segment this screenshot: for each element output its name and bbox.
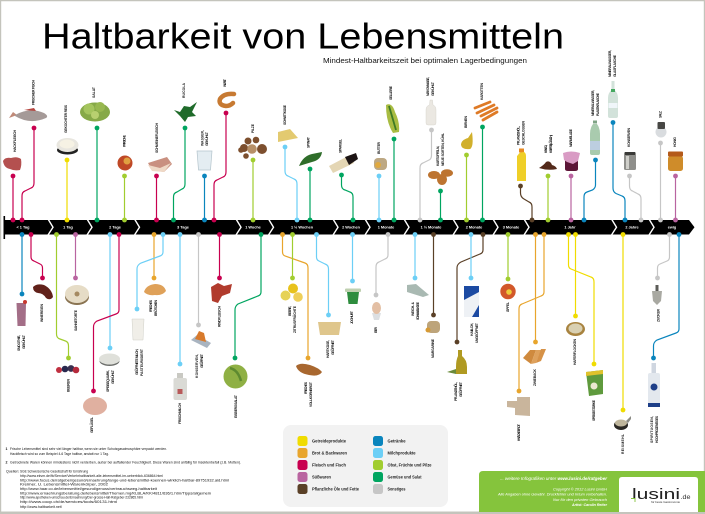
icon: lemons <box>280 284 303 302</box>
sources: Quellen: <box>6 470 19 474</box>
legend: Getreideprodukte: Getreideprodukte <box>312 438 347 444</box>
item: Honig: HONIG <box>673 137 677 147</box>
item: Pflanzenöl, geöffnet <box>447 232 485 401</box>
item: Frisches Vollkornbrot: FRISCHES <box>304 381 308 394</box>
item: Pfirsiche: PFIRSICHE <box>122 134 126 147</box>
item: Äpfel: ÄPFEL <box>506 302 510 312</box>
item: Zucker: ZUCKER <box>656 308 660 322</box>
item: Spinat <box>299 136 322 222</box>
timeline bar: 1 Monate <box>378 226 394 230</box>
icon: pear <box>461 132 473 149</box>
sources: http://www.apotheken-umschau.de/Ernaehrung/Der-grosse-Halt-Ratgeber-232865.html <box>20 496 143 500</box>
item: Birnen <box>461 115 473 222</box>
icon: smoothie glass <box>16 300 27 326</box>
item: Rindfleisch <box>211 232 232 327</box>
legend: Obst, Früchte und Pilze: Obst, Früchte und Pilze <box>388 462 432 468</box>
item: Salat: SALAT <box>92 86 96 98</box>
item: Innereien <box>29 232 53 322</box>
sources: http://www.ernaehrungsberatung.de/lebensmittel/Themen.mg/KLBLA/KK/4811/636/1.htm/Tipps/allgemein <box>20 492 211 496</box>
icon: tin of fish <box>191 331 211 348</box>
sources: http://www.ekvm.de/fb/Service/Verkehrhaltbarkeit-alle-lebensmittel-im-ueberblick-636864.html <box>20 474 163 478</box>
legend: Getränke: Getränke <box>388 438 406 444</box>
item: Butter: BUTTER <box>377 141 381 154</box>
icon: crispbread <box>507 397 530 416</box>
item: Wasser, gekühlt: WASSER, <box>200 130 204 146</box>
legend: Getränke <box>373 436 406 446</box>
sources: http://www.coop.ch/de/services/tools/60131.html <box>20 500 117 504</box>
item: Zwieback <box>523 232 546 386</box>
item: Fisch, geöffnet: GEÖFFNET <box>199 353 204 368</box>
title: Haltbarkeit von Lebensmitteln <box>42 16 564 56</box>
icon: glass bottle <box>608 81 618 118</box>
item: Schnittkäse: SCHNITTKÄSE <box>283 104 287 125</box>
icon: asparagus <box>329 153 358 173</box>
item: Sahnetorte: SAHNETORTE <box>74 309 78 331</box>
item: Rucola: RUCOLA <box>182 82 186 98</box>
item: Rucola <box>171 82 197 222</box>
footer panel: credits: Nur für den privaten Gebrauch <box>553 498 607 502</box>
item: Eier: EIER <box>374 326 378 333</box>
legend: Pflanzliche Öle und Fette: Pflanzliche Öle und Fette <box>312 486 360 492</box>
item: Mayonnaise, gekühlt: GEKÜHLT <box>430 81 435 96</box>
item: Weich- und Schimmelkäse: WEICH- & <box>411 301 415 316</box>
item: Geöffnete Milch: GEÖFFNETE MILCH, <box>134 349 139 375</box>
item: Pflanzenöl, geschlossen <box>516 120 534 222</box>
item: Mineralwasser, Glasflasche: GLASFLASCHE <box>613 54 617 77</box>
icon: apple <box>500 284 516 299</box>
item: H-Milch, ungeöffnet: UNGEÖFFNET <box>474 322 479 343</box>
item: Mayonnaise, gekühlt <box>418 77 436 222</box>
icon: egg in cup <box>372 302 381 320</box>
item: Mineralwasser, Plastikflasche: PLASTIKFLASCHE <box>596 92 600 116</box>
item: Spargel <box>329 139 358 222</box>
item: Spirituosen, hochprozentiges: SPIRITUOSEN, <box>650 416 654 443</box>
item: Reismehl <box>614 232 631 454</box>
icon: peach <box>118 156 132 170</box>
sources: http://www.haar.co.de/lebensmittel/gesund/genuss/verbrauchsweg-haltbarkeit <box>20 487 157 491</box>
item: Speisequark, gekühlt <box>99 232 120 392</box>
legend: Milchprodukte <box>373 448 416 458</box>
legend: Brot & Backwaren <box>298 448 347 458</box>
icon: potatoes <box>428 169 453 185</box>
icon: cream cake <box>65 285 89 305</box>
icon: jam jar <box>563 152 580 171</box>
legend: Sonstiges <box>373 484 406 494</box>
icon: spinach <box>299 152 322 166</box>
item: Rindfleisch: RINDFLEISCH <box>218 305 222 327</box>
item: Gekochter Reis: GEKOCHTER REIS <box>64 104 68 133</box>
footnotes: 2 <box>6 460 8 464</box>
timeline bar: 1 Tag <box>63 226 73 230</box>
icon: rusks <box>523 349 546 364</box>
footer panel: credits <box>479 471 705 512</box>
item: Joghurt <box>345 232 361 324</box>
item: Spirituosen, hochprozentiges <box>648 232 681 443</box>
legend: Süßwaren: Süßwaren <box>312 474 331 480</box>
item: Geöffnete Milch <box>132 232 165 376</box>
item: Gekochter Reis <box>56 104 78 222</box>
item: Frisches Vollkornbrot: VOLLKORNBROT <box>309 381 313 407</box>
icon: olive oil bottle <box>447 350 467 374</box>
timeline bar: 1 Jahr <box>564 226 576 230</box>
item: Sellerie: SELLERIE <box>389 85 393 100</box>
logo: lusini.de: .de <box>680 494 691 501</box>
timeline bar: 2 Monate <box>466 226 482 230</box>
item: Salz: SALZ <box>658 111 662 118</box>
sources <box>6 470 229 509</box>
footnotes: Frische Lebensmittel sind sehr viel länger haltbar, wenn sie unter Schutzgasatmosphäre verpackt werden. <box>10 447 167 451</box>
item: Wurst <box>212 78 234 222</box>
logo: lusini.de: lusini <box>632 486 680 503</box>
item: Karotten <box>475 82 497 222</box>
item: Hartkäse, geöffnet: GEÖFFNET <box>330 339 335 355</box>
item: Spinat: SPINAT <box>306 136 310 148</box>
icon: vodka bottle <box>648 363 660 407</box>
icon: starch pack <box>586 370 603 396</box>
item: Fisch, geöffnet: KONSERVEN, <box>195 354 199 378</box>
item: Frischer Fisch: FRISCHER FISCH <box>32 79 36 105</box>
item: Speisestärke <box>566 232 603 421</box>
item: H-Milch, ungeöffnet: H-MILCH, <box>470 323 474 336</box>
legend: Pflanzliche Öle und Fette <box>298 484 360 494</box>
item: Geöffnete Milch: PASTEURISIERT <box>140 348 144 376</box>
footnotes: 1 <box>6 447 8 451</box>
item: Haferflocken: HAFERFLOCKEN <box>573 338 577 365</box>
item: Knäckebrot: KNÄCKEBROT <box>517 423 521 441</box>
icon: butter <box>374 158 387 170</box>
item: Zitrusfrüchte: ZITRUSFRÜCHTE <box>292 305 297 333</box>
item: Beeren <box>54 232 79 392</box>
item: Kartoffeln <box>428 133 453 222</box>
icon: hard cheese block <box>318 322 341 335</box>
legend: Fleisch und Fisch: Fleisch und Fisch <box>312 462 346 468</box>
item: Smoothie, gekühlt <box>16 232 27 351</box>
item: Zitrusfrüchte <box>280 232 303 333</box>
icon: berries <box>56 365 79 373</box>
footer panel: credits: Artist: Carolin Reiter <box>571 503 608 507</box>
item: Zitrusfrüchte: BEERE, <box>288 306 292 316</box>
icon: mushrooms <box>238 137 267 159</box>
icon: poultry <box>83 397 107 415</box>
legend: Gemüse und Salat <box>373 472 422 482</box>
item: Pilze: PILZE <box>251 123 255 133</box>
timeline bar: 2 Tage <box>109 226 121 230</box>
item: Kartoffeln: KARTOFFELN, <box>436 146 440 166</box>
icon: carrots <box>475 102 497 120</box>
sources: http://www.focus.de/ratgeber/gesund/ernaehrung/lange-und-lebensmittel-koennen-wirklich-haltbar-89751932.aid.html <box>20 478 229 482</box>
item: Frisches Brötchen: BRÖTCHEN <box>153 299 158 316</box>
icon: loaf of bread <box>296 364 322 376</box>
icon: blue cheese <box>407 284 429 297</box>
icon: sausage ring <box>220 94 234 106</box>
icon: pork belly <box>148 157 172 172</box>
logo: lusini.de: für beste Gastronomie <box>651 500 681 504</box>
item: Birnen: BIRNEN <box>464 115 468 128</box>
sources: SGE Schweizerische Gesellschaft für Ernährung <box>20 470 88 474</box>
item: Hackfleisch: HACKFLEISCH <box>13 129 17 152</box>
item: Mineralwasser, Glasflasche <box>608 50 627 222</box>
timeline bar: 2 Wochen <box>342 226 361 230</box>
icon: quark bowl <box>99 354 120 366</box>
item: Hartkäse, geöffnet: HARTKÄSE, <box>326 340 330 358</box>
icon: white bottle <box>426 100 436 125</box>
item: Butter <box>374 141 387 222</box>
timeline bar: 1 ½ Wochen <box>291 226 314 230</box>
item: Frisches Vollkornbrot <box>280 232 322 407</box>
icon: fish <box>9 108 47 121</box>
legend: Obst, Früchte und Pilze <box>373 460 432 470</box>
item: Kakao, Kaffee: KAKAO, <box>544 145 548 153</box>
item: Eisbergsalat <box>224 232 263 418</box>
item: Salz <box>656 111 666 222</box>
item: Marmelade <box>563 128 580 222</box>
item: Spargel: SPARGEL <box>338 139 342 153</box>
item: Speisequark, gekühlt: GEKÜHLT <box>110 369 115 384</box>
item: Mineralwasser, Plastikflasche: MINERALWASSER, <box>591 90 595 116</box>
item: Speisestärke: SPEISESTÄRKE <box>592 399 596 421</box>
item: Pflanzenöl, geschlossen: PFLANZENÖL, <box>516 126 520 145</box>
timeline bar: ewig <box>668 226 677 230</box>
icon: steak <box>211 283 232 303</box>
item: Schweinefleisch <box>148 122 172 222</box>
item: Weich- und Schimmelkäse: SCHIMMELKÄSE <box>416 301 420 320</box>
item: Weich- und Schimmelkäse <box>407 232 429 320</box>
item: H-Milch, ungeöffnet <box>464 232 479 343</box>
item: Reismehl: REISMEHL <box>621 434 625 454</box>
timeline bar: 3 Monate <box>503 226 519 230</box>
item: Marmelade: MARMELADE <box>569 128 573 147</box>
item: Speisequark, gekühlt: SPEISEQUARK, <box>106 370 110 392</box>
item: Schnittkäse <box>278 104 299 222</box>
item: Wurst: WURST <box>223 78 227 87</box>
timeline bar: 2 Jahre <box>625 226 639 230</box>
footer panel: credits: Copyright © 2012 Lusini GmbH <box>553 488 607 492</box>
icon: flour scoop <box>614 416 631 430</box>
item: Konserven <box>624 127 643 222</box>
icon: bread roll <box>144 284 166 295</box>
item: Wasser, gekühlt <box>197 130 212 222</box>
item: Frischmilch <box>174 232 187 424</box>
icon: minced meat <box>3 157 21 170</box>
sources: Kreimer, U. Lebensmittel-Warenkörper, 2002 <box>20 482 108 486</box>
icon: oats bowl <box>566 322 585 336</box>
item: Schweinefleisch: SCHWEINEFLEISCH <box>155 122 159 153</box>
legend: Fleisch und Fisch <box>298 460 346 470</box>
icon: rucola <box>174 102 197 122</box>
icon: yoghurt cup <box>345 288 361 304</box>
item: Mineralwasser, Plastikflasche <box>582 90 600 222</box>
item: Frisches Brötchen <box>144 232 166 316</box>
item: Knäckebrot <box>507 232 546 441</box>
item: Sellerie <box>386 85 399 222</box>
timeline bar: < 1 Tag <box>17 226 30 230</box>
item: Pflanzenöl, geschlossen: GESCHLOSSEN <box>522 120 526 145</box>
footer panel: credits: ... weitere Infografiken unter www.lusini.de/ratgeber <box>500 476 607 481</box>
footer panel: credits: Alle Angaben ohne Gewähr. Druckfehler und Irrtum vorbehalten. <box>497 492 607 496</box>
icon: tin can <box>624 152 636 170</box>
item: Honig <box>668 137 683 222</box>
item: Kartoffeln: NEUE SORTEN, KÜHL <box>440 133 445 166</box>
item: Geflügel <box>83 232 121 433</box>
icon: kidney <box>33 284 53 299</box>
item: Hartkäse, geöffnet <box>314 232 341 358</box>
icon: lettuce <box>80 102 110 122</box>
icon: iceberg lettuce <box>224 364 248 388</box>
item: Pfirsiche <box>118 134 132 222</box>
item: Mayonnaise, gekühlt: MAYONNAISE, <box>426 77 430 96</box>
legend: Süßwaren <box>298 472 331 482</box>
item: Frischer Fisch <box>9 79 47 222</box>
icon: milk can <box>174 373 187 400</box>
item: Salat <box>80 86 110 222</box>
item: Eisbergsalat: EISBERGSALAT <box>234 394 238 418</box>
icon: glass of milk <box>132 319 144 340</box>
item: Zucker <box>652 232 672 322</box>
item: Fisch, geöffnet <box>191 232 211 378</box>
legend <box>283 425 448 507</box>
item: Mineralwasser, Glasflasche: MINERALWASSER, <box>608 50 612 77</box>
sources: http://www.haltbarkeit.net/ <box>20 505 62 509</box>
item: Kakao, Kaffee: KAFFEE (LÖSLICH) <box>548 135 553 153</box>
item: Pflanzenöl, geöffnet: GEÖFFNET <box>458 381 463 397</box>
timeline bar <box>4 216 694 239</box>
footnotes <box>6 447 241 464</box>
item: Margarine: MARGARINE <box>431 338 435 358</box>
timeline bar: 1 ½ Monate <box>421 226 441 230</box>
icon: plastic bottle <box>590 120 600 155</box>
timeline bar: 3 Tage <box>177 226 189 230</box>
item: Smoothie, gekühlt: GEKÜHLT <box>21 334 26 349</box>
item: Smoothie, gekühlt: SMOOTHIE, <box>17 335 21 351</box>
item: Sahnetorte <box>65 232 89 331</box>
item: Kakao, Kaffee <box>539 135 557 222</box>
icon: oil bottle <box>517 148 526 181</box>
icon: sliced cheese <box>278 129 298 142</box>
item: Geflügel: GEFLÜGEL <box>89 417 94 433</box>
item: Äpfel <box>500 232 516 312</box>
item: Zwieback: ZWIEBACK <box>533 368 537 386</box>
icon: margarine <box>426 321 440 333</box>
item: Frisches Brötchen: FRISCHES <box>149 299 153 312</box>
item: Margarine <box>426 232 440 358</box>
item: Spirituosen, hochprozentiges: HOCHPROZENTIGES <box>655 415 659 443</box>
icon: honey jar <box>668 152 683 171</box>
legend: Gemüse und Salat: Gemüse und Salat <box>388 474 422 480</box>
legend: Brot & Backwaren: Brot & Backwaren <box>312 450 347 456</box>
timeline bar: 1 Woche <box>245 226 261 230</box>
item: Beeren: BEEREN <box>66 378 70 392</box>
item: Pflanzenöl, geöffnet: PFLANZENÖL, <box>453 382 458 401</box>
item: Joghurt: JOGHURT <box>350 310 354 324</box>
icon: milk carton <box>464 286 479 317</box>
footnotes: Hackfleisch wird so zum Beispiel 4-6 Tage haltbar, anstatt nur 1 Tag. <box>10 452 109 456</box>
item: Wasser, gekühlt: GEKÜHLT <box>204 131 209 146</box>
item: Frischmilch: FRISCHMILCH <box>178 402 182 424</box>
icon: cocoa pile <box>539 161 557 170</box>
item: Konserven: KONSERVEN <box>627 127 631 147</box>
item: Haferflocken <box>566 232 585 365</box>
item: Innereien: INNEREIEN <box>40 303 44 322</box>
footnotes: Getrocknete Waren können mindestens nicht verderben, außer bei auffallender Feuchtigkeit. Diese Waren sind anfällig für Insektenbefall (z.B. Motten). <box>10 460 241 464</box>
item: Pilze <box>238 123 267 222</box>
icon: glass of water <box>197 151 212 170</box>
item: Karotten: KAROTTEN <box>480 82 484 100</box>
icon: sugar scoop <box>652 285 662 305</box>
icon: rice bowl <box>56 138 78 154</box>
icon: celery <box>386 104 399 133</box>
item: Eier <box>372 232 390 333</box>
logo: lusini.de <box>619 477 698 512</box>
legend: Milchprodukte: Milchprodukte <box>388 450 416 456</box>
subtitle: Mindest-Haltbarkeitszeit bei optimalen Lagerbedingungen <box>323 56 527 65</box>
icon: salt shaker <box>656 122 666 138</box>
item: Hackfleisch <box>3 129 21 222</box>
legend: Sonstiges: Sonstiges <box>388 486 406 492</box>
legend: Getreideprodukte <box>298 436 347 446</box>
